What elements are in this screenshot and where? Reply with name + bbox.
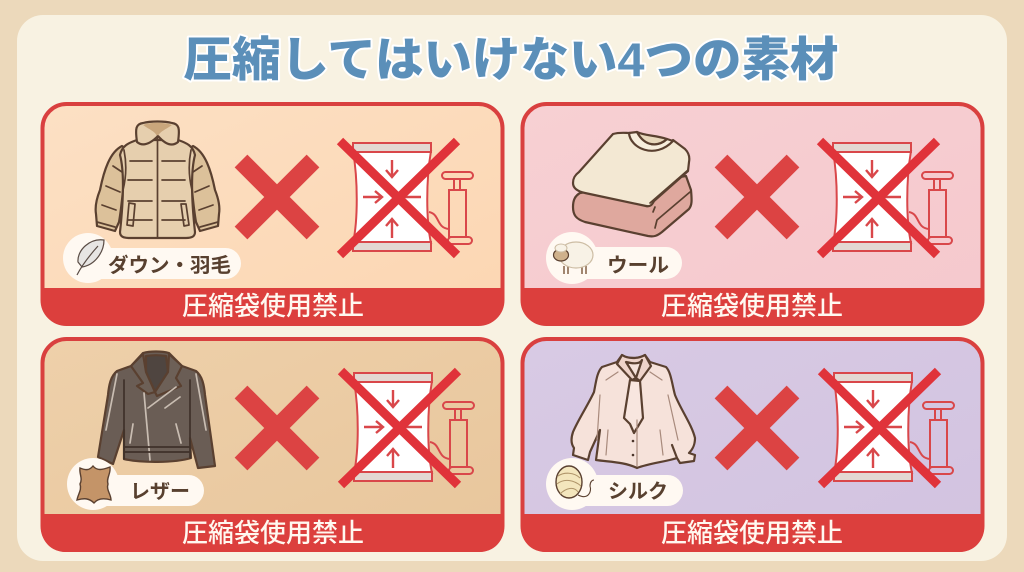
red band: leather <box>41 514 504 552</box>
red band: wool: 圧縮袋使用禁止 <box>661 291 843 321</box>
red band: leather: 圧縮袋使用禁止 <box>182 518 364 548</box>
panel: silk <box>521 339 984 552</box>
icon: leather hide <box>77 466 111 503</box>
big cross: down <box>241 161 313 233</box>
illustration: folded sweaters <box>573 132 692 236</box>
big cross: leather <box>241 392 313 464</box>
icon: feather <box>77 240 104 275</box>
big cross: silk <box>721 392 793 464</box>
label: leather <box>67 458 204 510</box>
red band: down <box>41 288 504 325</box>
text: silk: シルク <box>608 480 668 503</box>
panel: down and feather <box>41 104 504 325</box>
red band: silk: 圧縮袋使用禁止 <box>661 518 843 548</box>
panel: wool <box>521 104 984 325</box>
big cross: wool <box>721 161 793 233</box>
text: wool: ウール <box>607 254 669 277</box>
illustration: silk blouse <box>572 355 695 468</box>
illustration: leather jacket <box>98 352 215 468</box>
red band: silk <box>521 514 984 552</box>
icon: no vacuum bag <box>821 371 954 485</box>
icon: no vacuum bag <box>820 141 953 255</box>
label: wool <box>546 232 682 284</box>
icon: yarn ball <box>556 466 594 498</box>
text: leather: レザー <box>130 480 190 503</box>
icon: no vacuum bag <box>341 371 474 485</box>
icon: no vacuum bag <box>340 141 473 255</box>
title: 圧縮してはいけない4つの素材 <box>184 33 838 86</box>
text: down: ダウン・羽毛 <box>108 253 231 277</box>
label: silk <box>546 458 683 510</box>
icon: sheep <box>554 242 593 274</box>
red band: down: 圧縮袋使用禁止 <box>182 291 364 321</box>
illustration: down jacket <box>96 122 219 238</box>
red band: wool <box>521 288 984 325</box>
label: down <box>63 233 241 283</box>
panel: leather <box>41 339 504 552</box>
